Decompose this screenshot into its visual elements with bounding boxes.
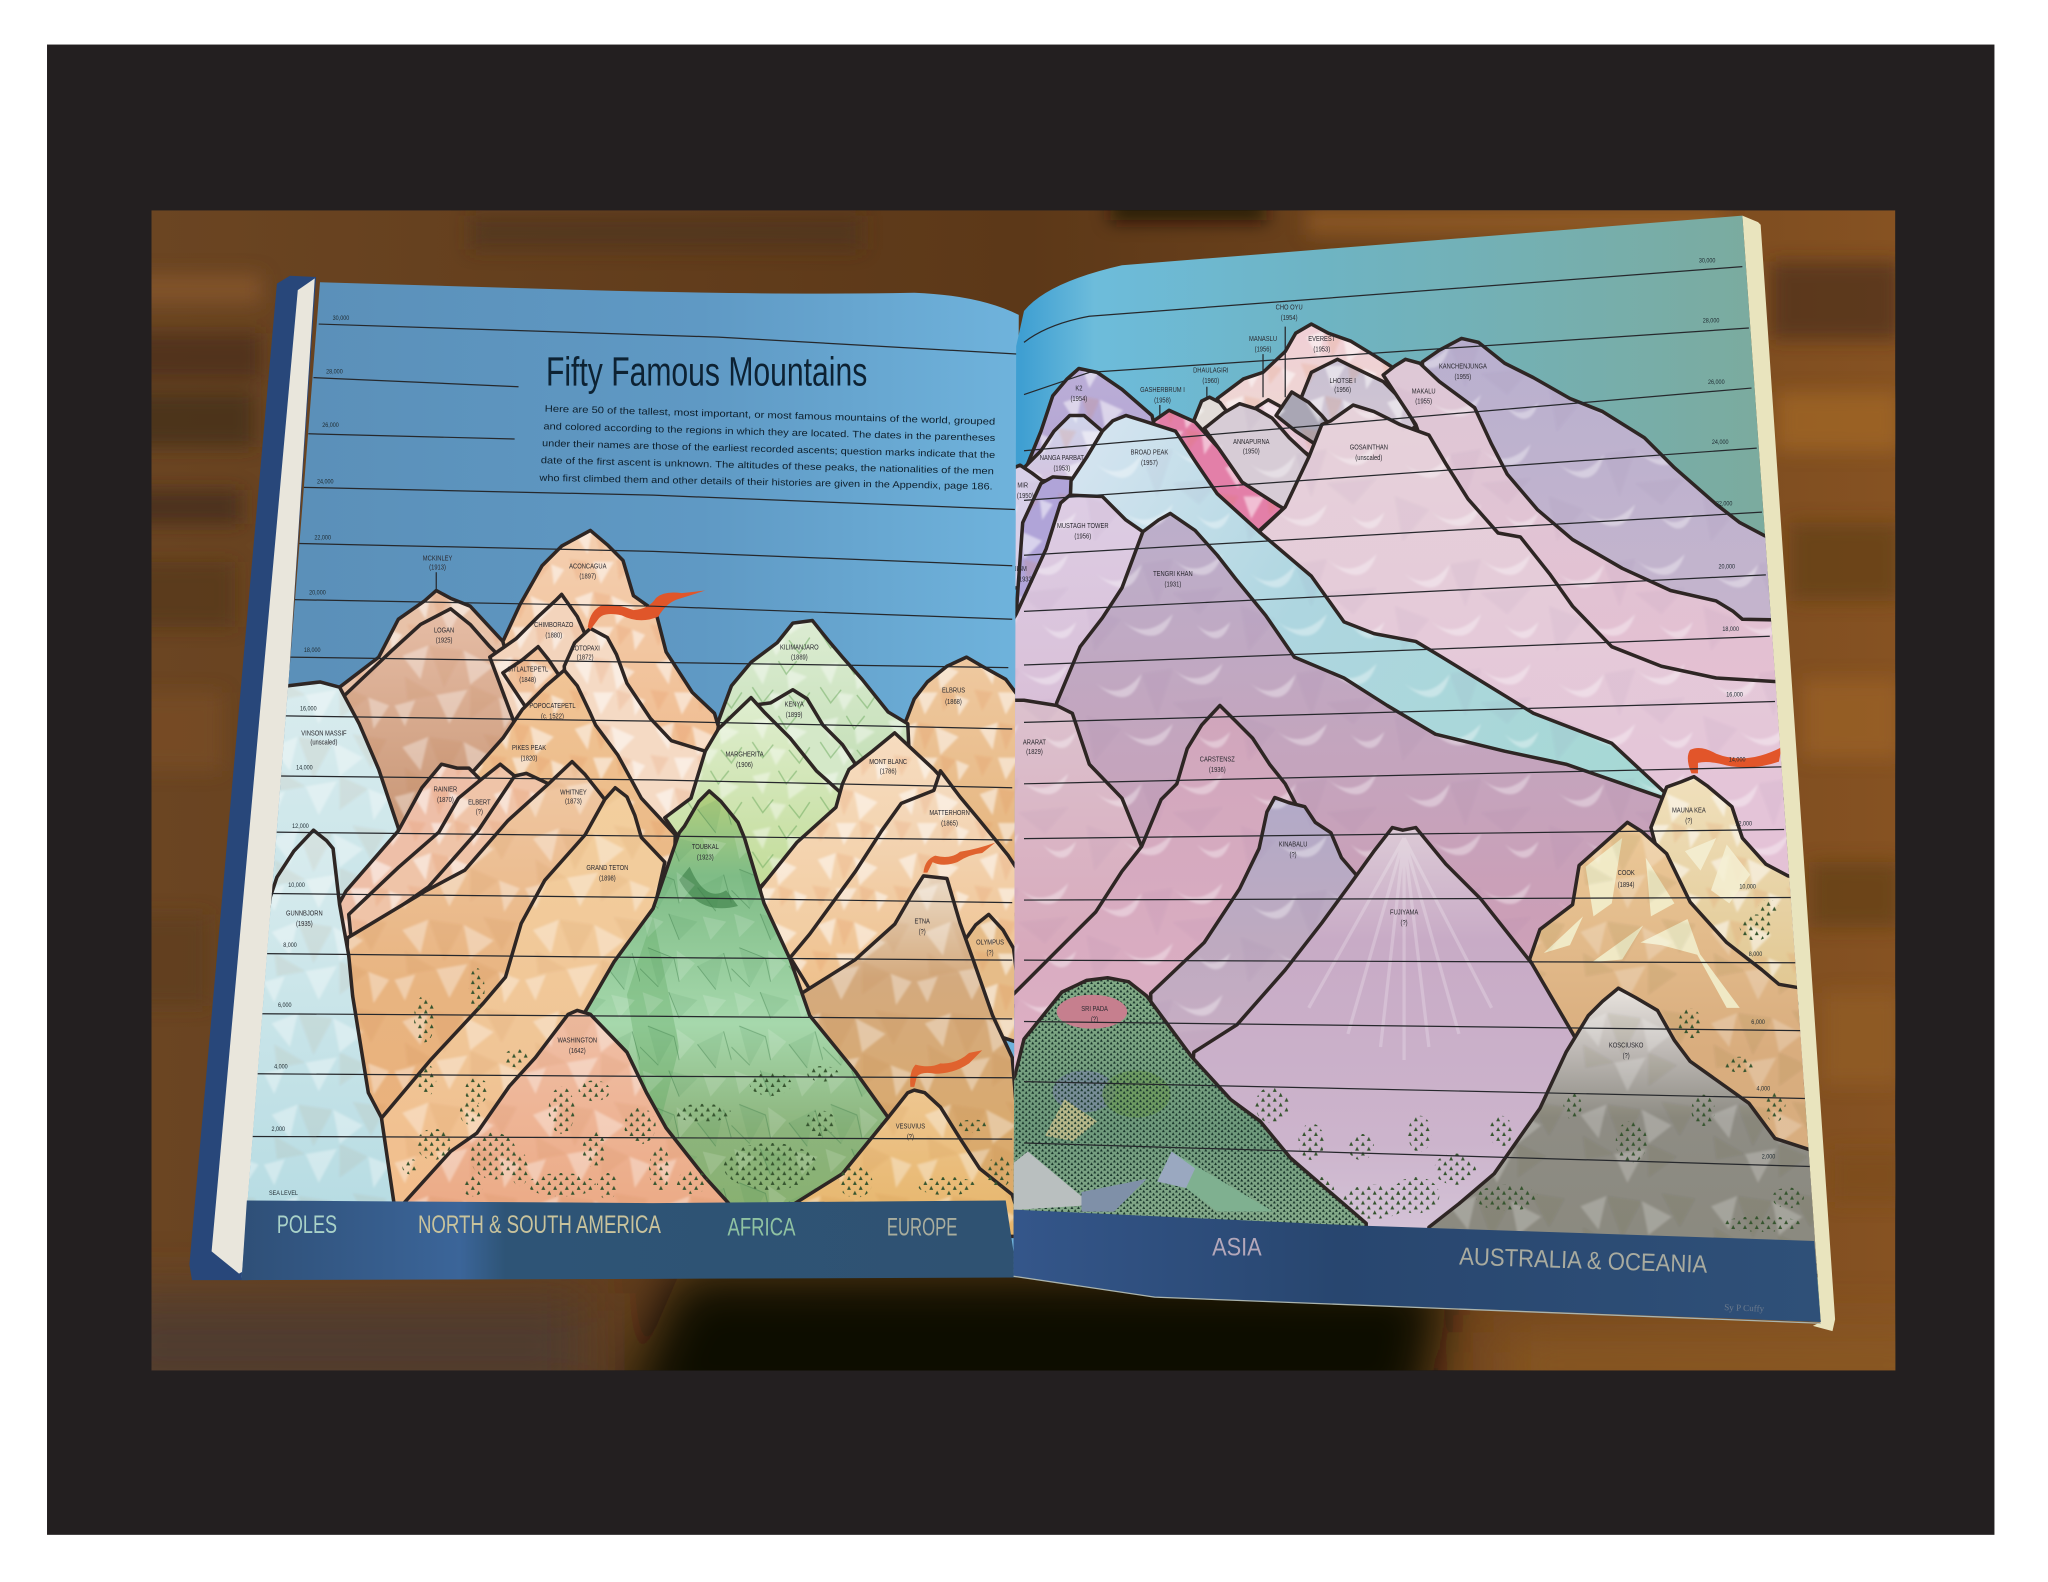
mountain: Whitney: [342, 762, 666, 1215]
altitude scale, left page: SEA LEVEL: [269, 1190, 298, 1197]
mountain name labels, left page: CITLALTEPETL: [507, 666, 549, 674]
mountain name labels, left page: WHITNEY: [560, 789, 587, 796]
altitude scale, right page: 18,000: [1722, 625, 1739, 633]
mountain name labels, right page: GASHERBRUM I: [1140, 386, 1185, 394]
mountain name labels, left page: (unscaled): [310, 739, 337, 747]
altitude scale, left page: 20,000: [309, 589, 326, 597]
region band, left page: [242, 1200, 1017, 1280]
title: Fifty Famous Mountains: [546, 348, 867, 394]
region band, right page: Sy P Cuffy: [1724, 1302, 1765, 1314]
mountain: Vesuvius: [790, 1090, 1025, 1236]
mountain name labels, left page: (1897): [579, 573, 596, 581]
mountain name labels, left page: (1868): [945, 699, 962, 706]
region band, left page: NORTH & SOUTH AMERICA: [418, 1212, 661, 1239]
mountain name labels, left page: MARGHERITA: [725, 751, 764, 759]
mountain name labels, right page: (1954): [1281, 315, 1298, 322]
mountain name labels, left page: GUNNBJORN: [286, 910, 323, 918]
mountain name labels, left page: (1899): [786, 712, 802, 719]
mountain name labels, right page: MUSTAGH TOWER: [1057, 522, 1109, 530]
tree clusters, left page: [402, 968, 1012, 1199]
mountain name labels, left page: (1865): [941, 820, 958, 828]
mountain name labels, right page: COMMUNISM: [990, 565, 1027, 573]
mountain name labels, left page: (?): [476, 808, 483, 816]
mountain: Popocatepetl and Pikes Peak: [472, 669, 676, 868]
mountain: Fujiyama: [1178, 828, 1588, 1276]
mountain: Gunnbjorn: [222, 830, 394, 1236]
introductory text block: under their names are those of the earliest recorded ascents; question marks indicate that the: [542, 437, 995, 460]
mountain name labels, right page: EVEREST: [1308, 335, 1335, 343]
mountain: Cook: [1529, 822, 1831, 1276]
region band, left page: POLES: [277, 1212, 337, 1239]
altitude scale, right page: 28,000: [1703, 317, 1720, 325]
mountain name labels, right page: TIRICH MIR: [997, 482, 1028, 490]
altitude scale, left page: 10,000: [288, 881, 305, 889]
mountain: Logan: [344, 607, 512, 826]
mountain: Carstensz: [1008, 705, 1309, 1084]
mountain name labels, left page: (1935): [296, 921, 313, 928]
altitude scale, right page: 12,000: [1735, 820, 1753, 828]
mountain name labels, right page: (1894): [1618, 881, 1634, 889]
mountain name labels, right page: (1936): [1209, 766, 1226, 774]
mountain: Lhotse: [1298, 359, 1416, 451]
altitude scale, right page: 30,000: [1699, 257, 1716, 265]
mountain name labels, left page: RAINIER: [434, 786, 457, 794]
mountain name labels, right page: ARARAT: [1023, 739, 1046, 747]
mountain name labels, left page: VESUVIUS: [896, 1123, 926, 1131]
mountain name labels, right page: KANCHENJUNGA: [1439, 363, 1487, 371]
mountain name labels, right page: COOK: [1618, 870, 1635, 877]
altitude scale, right page: 8,000: [1749, 951, 1763, 958]
mountain: Gasherbrum I: [1152, 410, 1285, 533]
mountain name labels, right page: (unscaled): [1355, 454, 1382, 462]
altitude scale, left page: 16,000: [300, 705, 317, 713]
Sri Pada foothills: [1045, 1071, 1170, 1141]
mountain name labels, right page: MANASLU: [1249, 335, 1277, 343]
mountain: Communism: [1016, 477, 1087, 614]
mountain: K2: [1027, 368, 1159, 523]
mountain: Mustagh Tower: [1002, 495, 1143, 914]
mountain: Kinabalu: [1151, 798, 1387, 1086]
mountain name labels, right page: BROAD PEAK: [1131, 449, 1169, 457]
wooden table photo: [104, 203, 1946, 1424]
mountain name labels, left page: (1925): [436, 637, 452, 645]
altitude scale, right page: 20,000: [1718, 563, 1736, 571]
mountain: Tirich Mir: [1002, 465, 1042, 588]
mountain: Ararat: [1002, 700, 1142, 1006]
mountain name labels, left page: (1642): [569, 1047, 586, 1055]
mountain name labels, left page: (?): [907, 1134, 914, 1141]
mountain: Mauna Kea: [1651, 777, 1825, 1021]
mountain: Olympus: [963, 914, 1025, 1045]
mountain name labels, right page: MAKALU: [1412, 388, 1436, 396]
mountain name labels, left page: MCKINLEY: [423, 555, 453, 563]
mountain name labels, right page: (1956): [1255, 346, 1271, 354]
mountain name labels, right page: DHAULAGIRI: [1193, 367, 1229, 375]
altitude scale, left page: 12,000: [292, 823, 309, 830]
mountain name labels, left page: ACONCAGUA: [569, 563, 607, 571]
mountain: Gosainthan: [1259, 405, 1844, 1084]
mountain name labels, right page: CARSTENSZ: [1200, 756, 1235, 764]
mountain name labels, left page: ELBRUS: [942, 687, 966, 695]
mountain name labels, left page: COTOPAXI: [570, 645, 600, 653]
mountain name labels, right page: (1931): [1165, 581, 1181, 589]
mountain name labels, left page: (1848): [519, 676, 536, 684]
mountain name labels, right page: TENGRI KHAN: [1153, 571, 1193, 578]
altitude scale, left page: 6,000: [278, 1002, 292, 1009]
introductory text block: and colored according to the regions in which they are located. The dates in the parentheses: [543, 420, 996, 443]
mountain name labels, right page: LHOTSE I: [1330, 377, 1356, 385]
region band, left page: EUROPE: [887, 1215, 957, 1242]
mountain name labels, left page: (1923): [697, 854, 714, 862]
mountain name labels, left page: [286, 555, 1005, 1141]
altitude scale, left page: [269, 315, 350, 1197]
mountain: Kanchenjunga: [1422, 338, 1805, 705]
mountain name labels, left page: (1913): [429, 564, 446, 572]
mountain name labels, left page: (?): [919, 928, 926, 936]
mountain: Elbert: [349, 764, 515, 954]
altitude scale, right page: 4,000: [1757, 1085, 1771, 1093]
mountain: Elbrus: [904, 655, 1016, 862]
mountain name labels, left page: (1872): [577, 654, 594, 662]
mountain name labels, right page: (?): [1401, 919, 1408, 927]
mountain name labels, right page: (1829): [1026, 748, 1043, 756]
altitude scale, left page: 2,000: [271, 1126, 286, 1133]
mountain name labels, left page: VINSON MASSIF: [301, 730, 347, 738]
mountain name labels, right page: GOSAINTHAN: [1350, 444, 1388, 452]
page block edge, right: [1742, 216, 1835, 1331]
region band, right page: ASIA: [1212, 1234, 1262, 1261]
mountain name labels, left page: ETNA: [914, 918, 930, 926]
mountain name labels, left page: (1870): [437, 797, 454, 804]
mountain: unnamed ridge: [349, 773, 549, 960]
mountain: Everest: [1217, 324, 1396, 431]
mountain: Nanga Parbat: [1021, 415, 1102, 481]
mountain name labels, left page: PIKES PEAK: [512, 744, 547, 752]
mountain name labels, left page: KENYA: [785, 701, 804, 709]
mountain name labels, left page: OLYMPUS: [976, 939, 1005, 947]
altitude scale, right page: 10,000: [1739, 883, 1756, 891]
mountain name labels, right page: CHO OYU: [1276, 304, 1303, 312]
volcano plume: Cotopaxi: [588, 591, 705, 630]
region band, right page: [1014, 1210, 1821, 1323]
mountain name labels, left page: TOUBKAL: [692, 844, 719, 851]
mountain: Cotopaxi: [562, 627, 704, 822]
mountain name labels, left page: MATTERHORN: [929, 810, 970, 817]
altitude scale, right page: 2,000: [1762, 1153, 1776, 1161]
mountain name labels, right page: (1953): [1054, 465, 1070, 473]
mountain name labels, left page: WASHINGTON: [558, 1037, 597, 1045]
mountain: Dhaulagiri: [1194, 397, 1228, 444]
mountain name labels, left page: ELBERT: [468, 799, 491, 807]
left page: [222, 282, 1025, 1278]
altitude lines, left page: [251, 324, 1019, 1139]
altitude scale, left page: 26,000: [322, 422, 339, 429]
Sri Pada summit clearing: [1057, 995, 1127, 1029]
mountain name labels, left page: (1889): [791, 654, 808, 662]
mountain name labels, left page: (?): [987, 949, 994, 957]
mountain name labels, right page: SRI PADA: [1081, 1006, 1108, 1013]
mountain name labels, left page: KILIMANJARO: [780, 644, 819, 652]
mountain name labels, right page: (?): [1091, 1016, 1098, 1024]
book cover spine: [189, 276, 316, 1280]
volcano plume: Etna: [923, 843, 995, 873]
altitude scale, left page: 18,000: [304, 646, 321, 654]
mountain name labels, right page: (1954): [1070, 396, 1087, 403]
mountain name labels, right page: (1960): [1202, 377, 1219, 385]
mountain: Citlaltepetl: [501, 644, 559, 706]
mountain name labels, right page: [990, 304, 1706, 1060]
mountain: Vinson Massif: [248, 680, 400, 1196]
mountain: Kosciusko: [1429, 988, 1831, 1276]
mountain name labels, left page: (1906): [736, 761, 753, 769]
mountain: McKinley: [339, 588, 502, 693]
volcano plume: Vesuvius: [910, 1050, 982, 1087]
mountain name labels, right page: (1950): [1017, 492, 1034, 500]
mountain: Mont Blanc: [760, 733, 947, 1045]
mountain name labels, right page: KINABALU: [1279, 841, 1308, 849]
mountain name labels, right page: KOSCIUSKO: [1609, 1042, 1643, 1050]
mountain name labels, right page: (1956): [1334, 386, 1351, 394]
altitude scale, right page: 6,000: [1751, 1019, 1765, 1026]
mountain: Margherita: [665, 698, 842, 887]
mountain: Chimborazo: [488, 592, 586, 722]
mountain: small grey ridge: [1276, 392, 1335, 444]
altitude scale, left page: 4,000: [274, 1063, 288, 1071]
mountain name labels, right page: MAUNA KEA: [1672, 807, 1706, 815]
introductory text block: who first climbed them and other details of their histories are given in the Appendix, page 186.: [538, 472, 993, 491]
page block edge, left: [212, 278, 315, 1274]
altitude scale, right page: 22,000: [1716, 500, 1733, 508]
mountain name labels, right page: (1950): [1243, 448, 1260, 456]
altitude scale, left page: 14,000: [296, 764, 313, 772]
altitude scale, right page: 16,000: [1726, 691, 1743, 699]
mountain name labels, right page: (1956): [1074, 533, 1091, 540]
mountain name labels, right page: ANNAPURNA: [1233, 439, 1270, 446]
mountain: small pink ridge: [1250, 400, 1331, 460]
mountain name labels, right page: (1955): [1415, 398, 1432, 406]
altitude scale, left page: 8,000: [283, 942, 297, 949]
mountain name labels, right page: (1933): [1017, 576, 1034, 584]
mountain name labels, left page: MONT BLANC: [869, 759, 907, 766]
introductory text block: [538, 403, 996, 491]
altitude scale, left page: 24,000: [317, 478, 334, 486]
mountain name labels, left page: POPOCATEPETL: [529, 702, 576, 710]
mountain name labels, right page: (1955): [1454, 373, 1471, 381]
mountain name labels, left page: GRAND TETON: [586, 864, 629, 872]
altitude scale, left page: 28,000: [326, 368, 343, 376]
introductory text block: Here are 50 of the tallest, most important, or most famous mountains of the world, grouped: [545, 403, 995, 427]
mountain name labels, right page: K2: [1075, 385, 1083, 393]
mountain name labels, left page: CHIMBORAZO: [534, 622, 573, 629]
mountain name labels, right page: (?): [1290, 851, 1297, 859]
altitude scale, right page: 24,000: [1712, 439, 1729, 446]
mountain name labels, right page: (?): [1623, 1053, 1630, 1060]
introductory text block: date of the first ascent is unknown. The altitudes of these peaks, the nationalities of the men: [541, 454, 994, 476]
altitude scale, right page: 14,000: [1729, 756, 1746, 764]
region band, right page: AUSTRALIA & OCEANIA: [1459, 1243, 1708, 1279]
mountain: Tengri Khan: [1057, 513, 1688, 1084]
mountain name labels, left page: (1820): [521, 755, 537, 763]
mountain name labels, left page: (1873): [565, 798, 582, 806]
mountain: Aconcagua: [501, 528, 720, 749]
mountain: Makalu: [1383, 359, 1812, 810]
mountain: Matterhorn: [790, 771, 1025, 1032]
mountain: Grand Teton: [381, 788, 665, 1228]
mountain name labels, right page: (?): [1685, 817, 1692, 825]
altitude scale, right page: [1699, 257, 1776, 1161]
mountain: Rainier: [340, 762, 481, 936]
altitude lines, right page: [1024, 267, 1810, 1167]
mountain name labels, left page: (1786): [880, 768, 897, 776]
volcano plume: Mauna Kea: [1688, 747, 1782, 773]
mountain name labels, right page: (1958): [1154, 397, 1171, 405]
mountain name labels, right page: (1953): [1313, 346, 1330, 354]
altitude scale, left page: 22,000: [314, 534, 331, 542]
mountain name labels, right page: FUJIYAMA: [1390, 909, 1419, 917]
mountain: Annapurna: [1204, 404, 1311, 510]
mountain: Toubkal: [585, 791, 888, 1214]
mountain: Sri Pada: [1002, 978, 1366, 1276]
mountain name labels, left page: (1880): [545, 632, 562, 640]
mountain name labels, left page: (1898): [599, 875, 616, 883]
mountain: Kilimanjaro: [718, 618, 911, 762]
mountain: Washington: [401, 1010, 731, 1236]
mountain name labels, right page: (1957): [1141, 460, 1158, 467]
altitude scale, left page: 30,000: [333, 315, 350, 322]
mountain: Etna: [784, 876, 1025, 1217]
mountain name labels, left page: LOGAN: [434, 627, 454, 635]
mountain name labels, right page: NANGA PARBAT: [1040, 454, 1084, 462]
mountain name labels, left page: (c. 1522): [541, 713, 564, 721]
region band, left page: AFRICA: [728, 1215, 796, 1242]
mountain: Broad Peak: [1048, 415, 1667, 1084]
tree clusters, right page: [1255, 900, 1804, 1232]
mountain: Kenya: [751, 690, 856, 849]
altitude scale, right page: 26,000: [1708, 379, 1725, 386]
right page: [990, 216, 1844, 1323]
